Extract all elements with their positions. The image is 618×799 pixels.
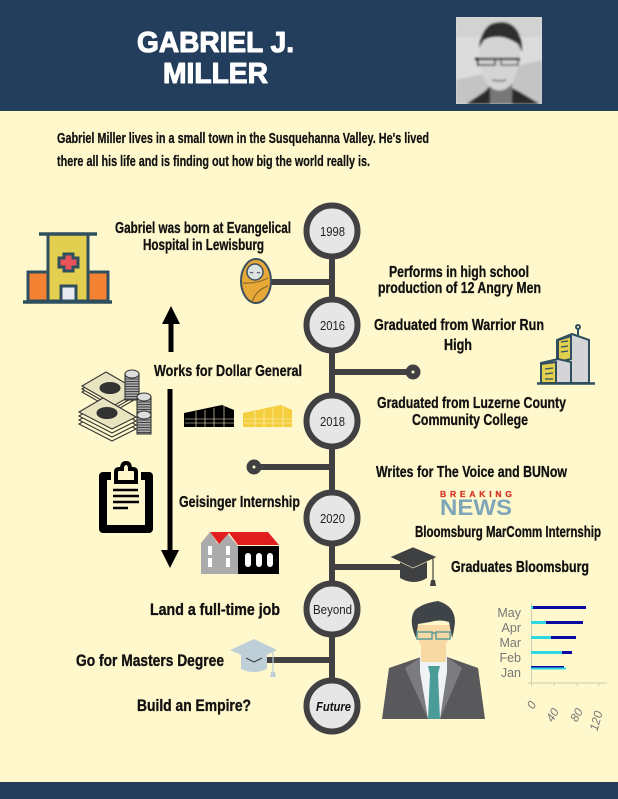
chart month labels: Feb — [499, 651, 521, 665]
chart axis labels: 0 — [524, 698, 539, 711]
node Future: Future — [316, 699, 351, 714]
chart axis labels: 80 — [567, 705, 586, 724]
year node 2018: 2018 — [320, 414, 345, 429]
title — [137, 27, 294, 90]
text: high school play — [378, 264, 541, 297]
chart axis labels — [524, 698, 606, 732]
text: high school play: production of 12 Angry Men — [378, 280, 541, 297]
text: community college: Graduated from Luzerne County — [377, 395, 566, 412]
intro paragraph — [57, 131, 429, 170]
year node 2020: 2020 — [320, 511, 345, 526]
text: born — [115, 220, 291, 254]
chart axis labels: 120 — [587, 709, 606, 732]
arrow down — [161, 389, 179, 568]
text: dollar general: Works for Dollar General — [154, 363, 302, 380]
text: masters: Go for Masters Degree — [76, 651, 224, 670]
year node 2016: 2016 — [320, 318, 345, 333]
text: writes: Writes for The Voice and BUNow — [376, 464, 567, 481]
timeline spine and branches — [254, 231, 413, 706]
year node 2018 — [306, 396, 358, 446]
title: GABRIEL J. — [137, 27, 294, 59]
portrait photo — [456, 17, 542, 104]
icon: clipboard — [103, 463, 149, 529]
arrow up — [162, 306, 180, 352]
chart month labels: Apr — [502, 621, 521, 635]
intro paragraph: there all his life and is finding out how big the world really is. — [57, 154, 370, 170]
chart month labels: May — [497, 606, 522, 620]
icon: swaddled baby — [241, 259, 271, 303]
icon: cash and coins — [79, 370, 151, 441]
chart month labels: Jan — [501, 666, 521, 680]
node Beyond — [306, 584, 358, 634]
illustration: businessman — [382, 601, 485, 719]
branch end dot: 2018 — [246, 460, 262, 474]
year node 1998 — [306, 206, 358, 256]
chart month labels: Mar — [499, 636, 521, 650]
text: community college: Community College — [412, 412, 528, 429]
text: born: Hospital in Lewisburg — [143, 237, 264, 254]
header band — [0, 0, 618, 111]
chart month labels — [497, 606, 522, 680]
icon: graduation cap dark — [390, 547, 437, 586]
chart: horizontal bars by month — [497, 603, 607, 732]
text: graduated high school: Graduated from Warrior Run — [374, 317, 544, 334]
text: community college — [377, 395, 566, 429]
node Beyond: Beyond — [313, 602, 352, 617]
node Future — [306, 680, 358, 732]
text: geisinger: Geisinger Internship — [179, 494, 300, 511]
logo: breaking news: NEWS — [440, 495, 512, 520]
text: graduated high school: High — [444, 337, 472, 354]
text: high school play: Performs in high school — [389, 264, 529, 281]
year node 1998: 1998 — [320, 224, 345, 239]
year node 2016 — [306, 300, 358, 350]
icon: black building — [184, 405, 234, 427]
text: born: Gabriel was born at Evangelical — [115, 220, 291, 237]
text: full-time job: Land a full-time job — [150, 600, 280, 619]
chart axis labels: 40 — [543, 705, 562, 724]
branch end dot: 2016 — [406, 364, 420, 380]
text: empire: Build an Empire? — [137, 696, 251, 715]
icon: yellow building — [243, 405, 292, 427]
icon: graduation cap light — [230, 639, 277, 677]
icon: office towers — [537, 325, 595, 384]
logo: breaking news: BREAKING — [440, 489, 512, 499]
footer band — [0, 782, 618, 799]
icon: hospital — [23, 234, 112, 302]
text: graduated high school — [374, 317, 544, 354]
chart bars — [531, 606, 586, 670]
icon: red-roofed house — [201, 532, 279, 574]
title: MILLER — [163, 58, 268, 90]
year node 2020 — [306, 492, 358, 544]
intro paragraph: Gabriel Miller lives in a small town in the Susquehanna Valley. He's lived — [57, 131, 429, 147]
